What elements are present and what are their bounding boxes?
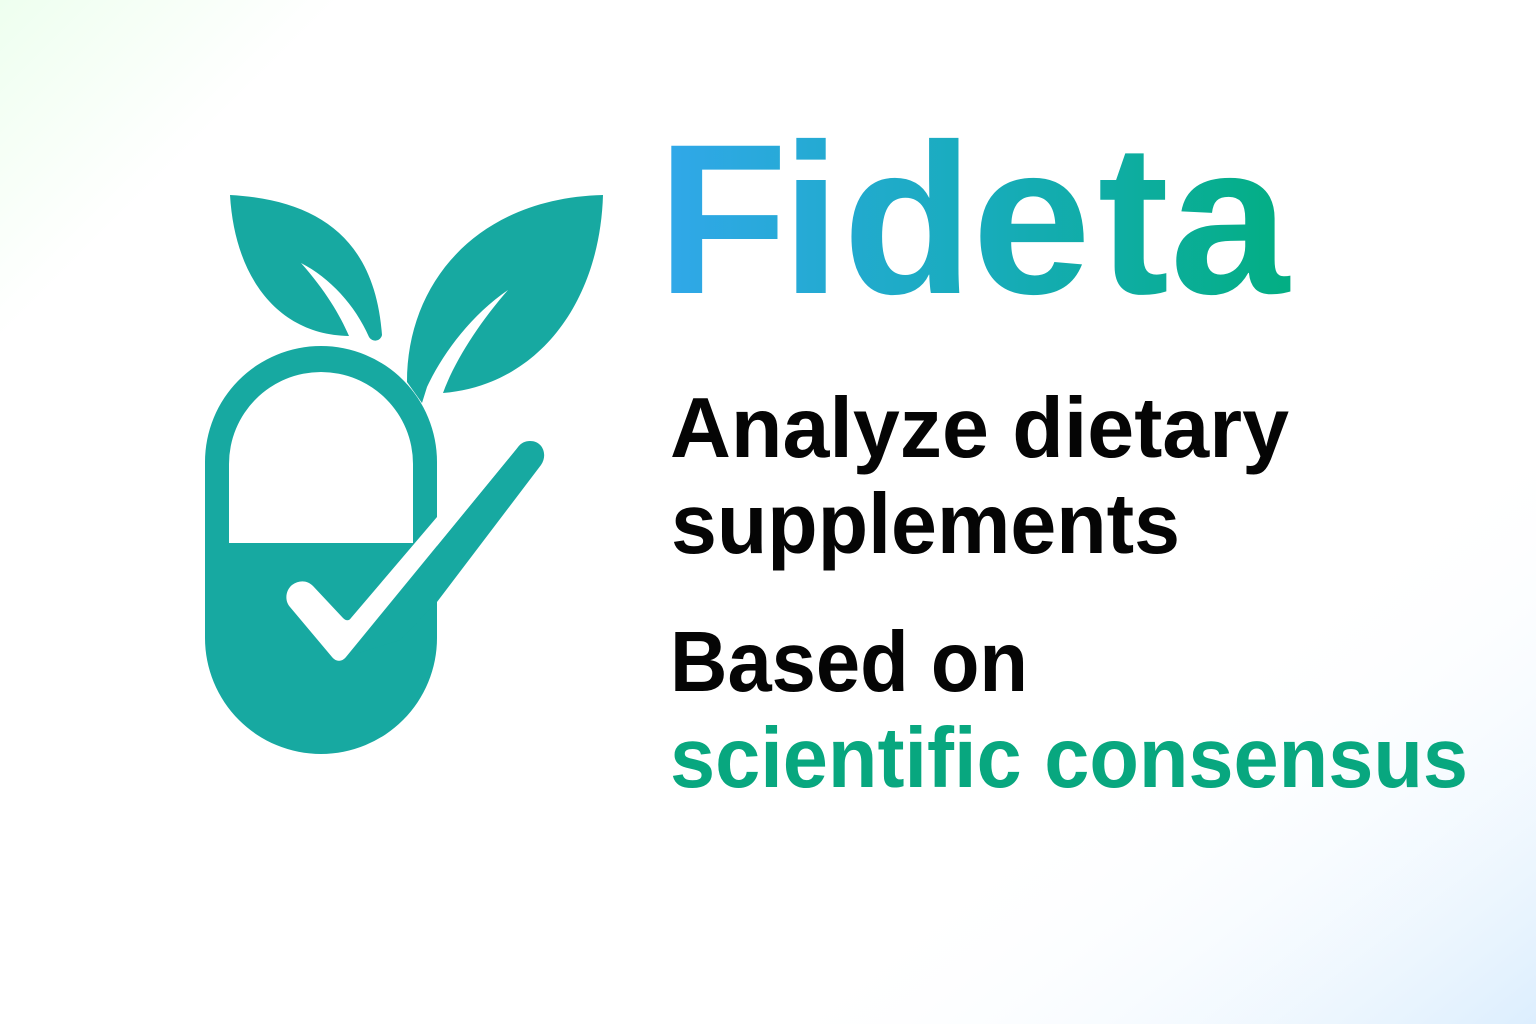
icon: checkmark long arm — [346, 441, 544, 657]
text: Based on scientific consensus: Based on — [670, 615, 1028, 710]
text: Based on scientific consensus: scientific consensus — [670, 711, 1468, 806]
text: Analyze dietary supplements — [670, 381, 1289, 572]
icon: white checkmark cutout — [286, 447, 518, 661]
title: Fideta: Fideta — [657, 100, 1291, 339]
icon: left leaf — [230, 195, 382, 341]
icon: capsule — [205, 346, 437, 754]
text: Analyze dietary supplements: Analyze dietary — [670, 381, 1289, 476]
icon: right leaf — [407, 195, 603, 403]
logo: capsule with leaves and checkmark — [205, 195, 603, 754]
text: Based on scientific consensus — [670, 615, 1468, 806]
text: Analyze dietary supplements: supplements — [671, 477, 1180, 572]
